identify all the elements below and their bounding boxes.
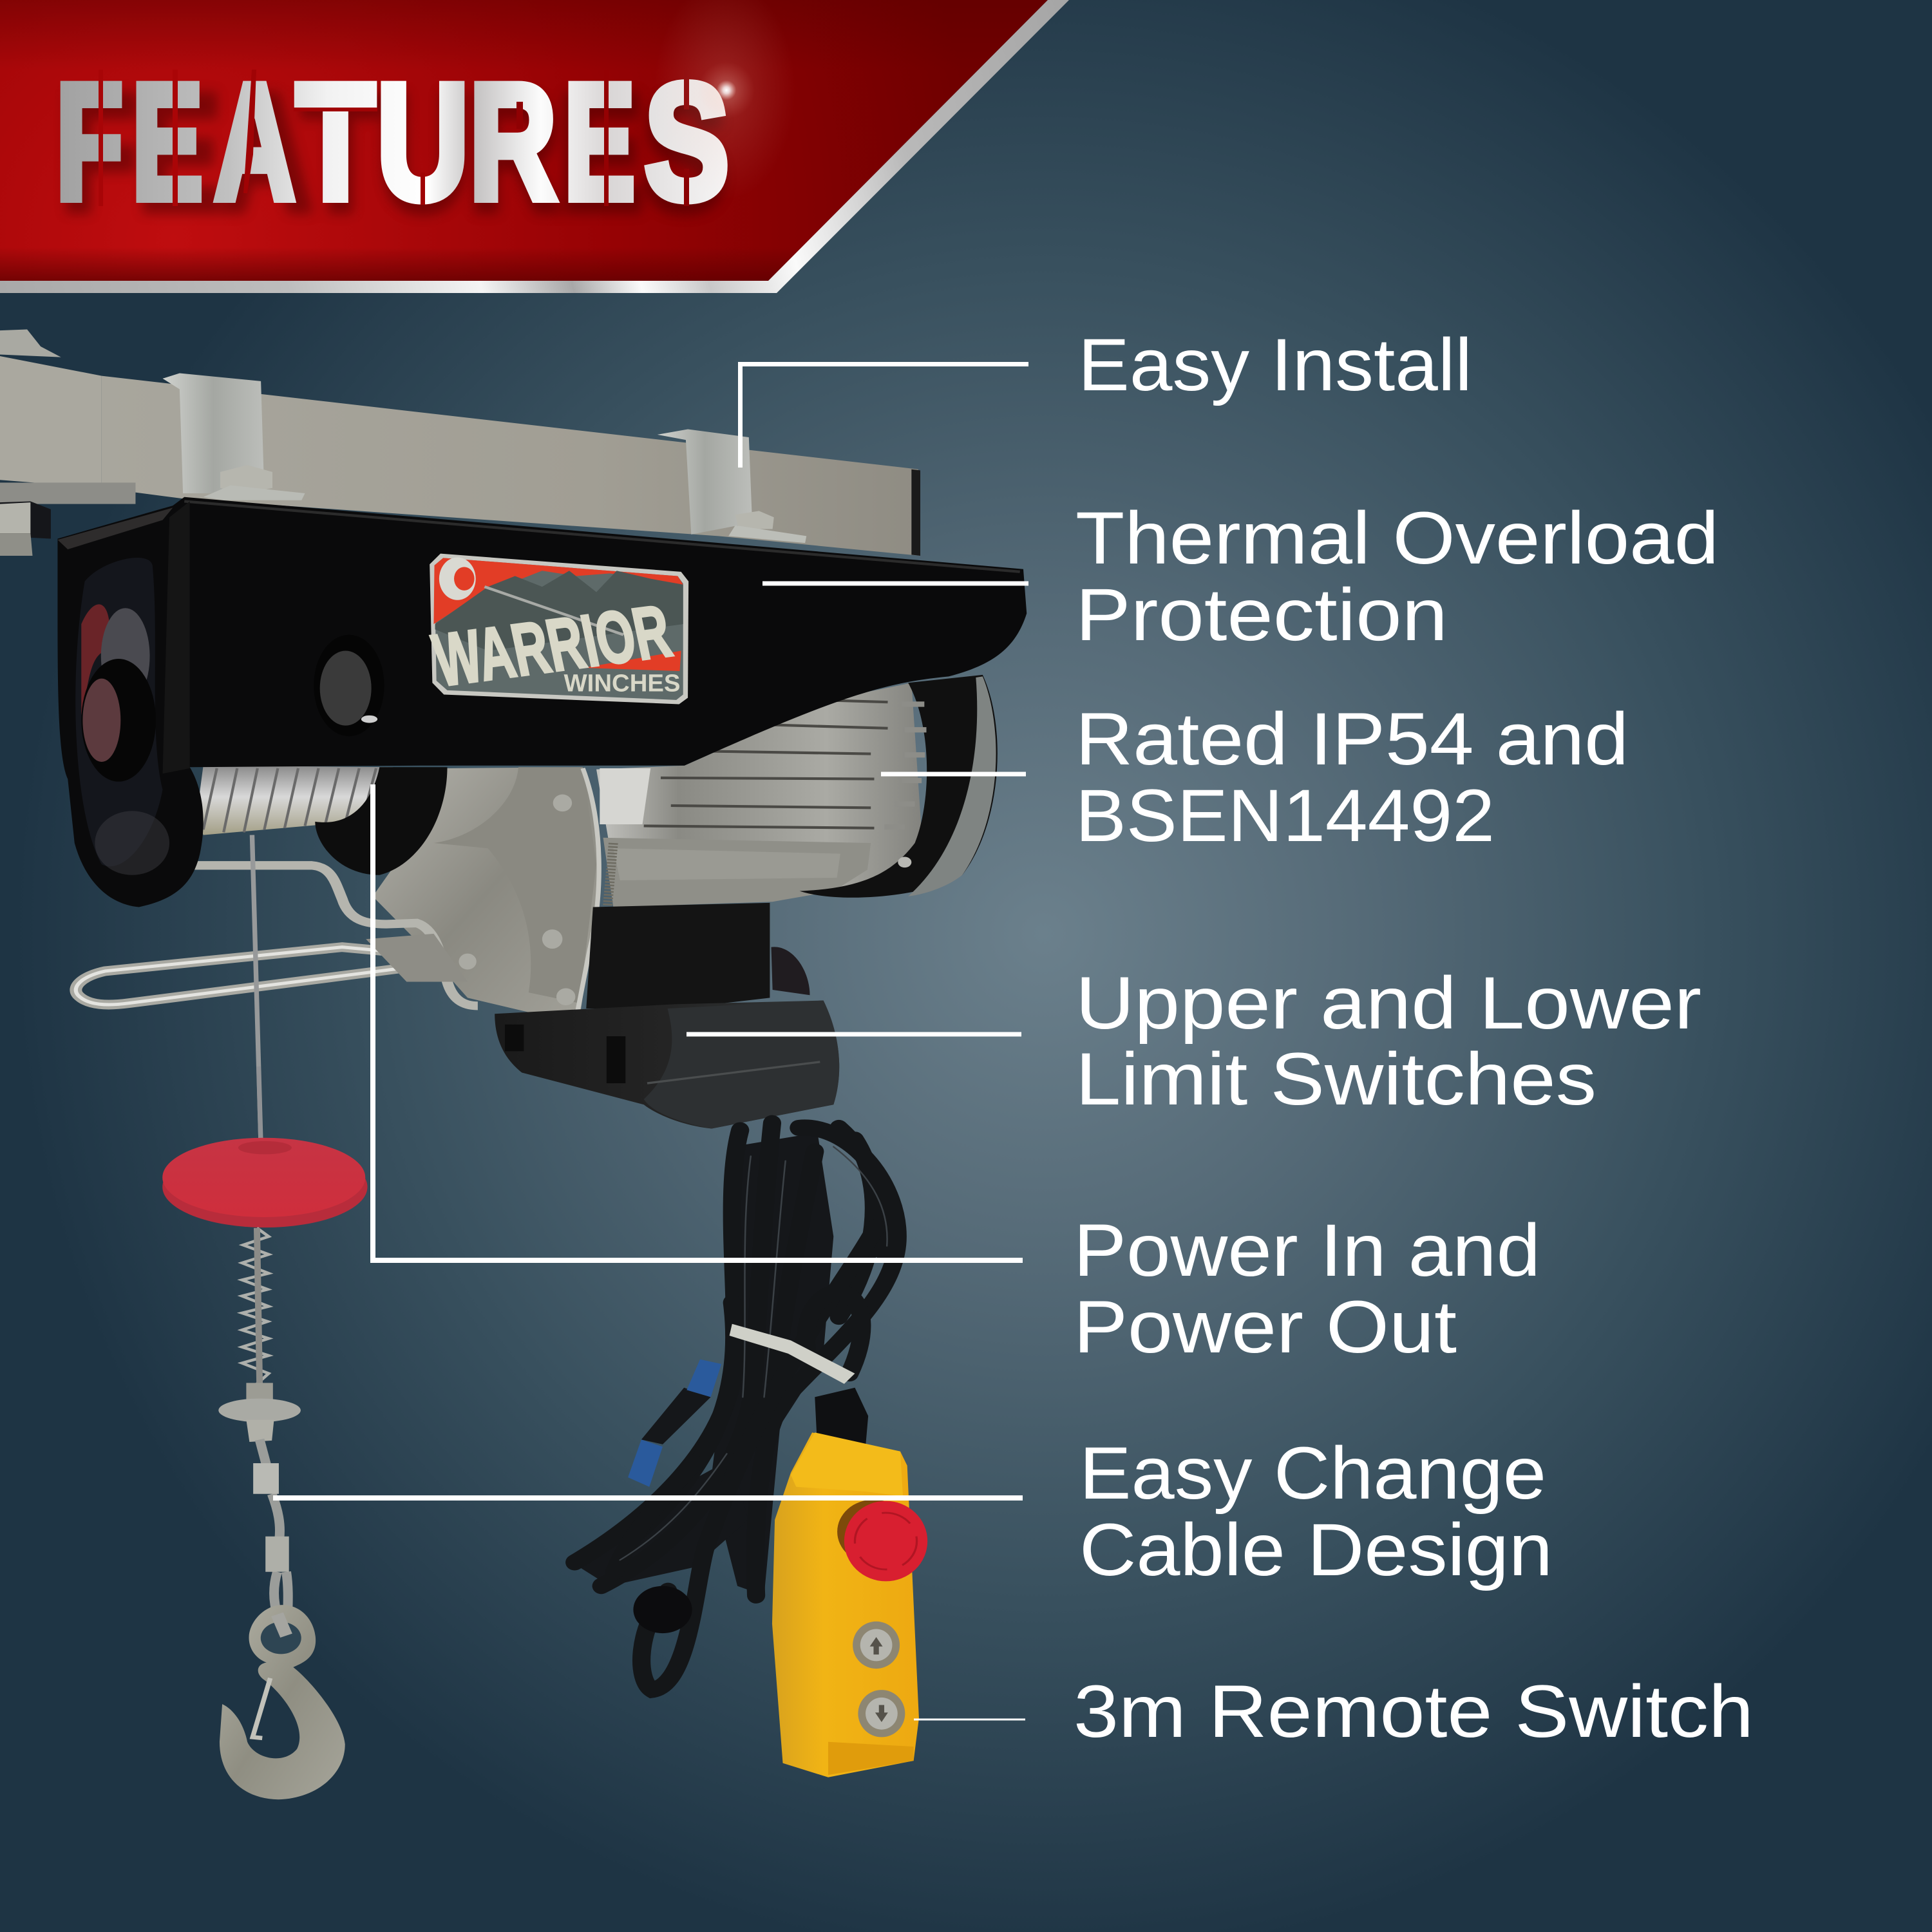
- label: limit switches: [1075, 962, 1701, 1121]
- gearbox bolts: [459, 795, 575, 1005]
- wheel hub: [81, 659, 156, 782]
- spring: [607, 843, 613, 918]
- cable highlights: [620, 1147, 887, 1560]
- heading: features: U: [377, 50, 469, 234]
- label: easy install: Easy Install: [1078, 324, 1472, 406]
- label: power in and out: Power In and: [1074, 1209, 1540, 1292]
- cable plug: [633, 1586, 692, 1633]
- beam end bolt: [0, 330, 135, 556]
- beam: [102, 376, 920, 556]
- limit switch housing: [495, 1001, 839, 1129]
- label: rated ip54: BSEN14492: [1075, 775, 1495, 857]
- cable coil: [574, 1123, 898, 1690]
- red stopper disc: [162, 1138, 368, 1227]
- spring: [242, 1228, 269, 1384]
- heading: features: F: [56, 50, 123, 234]
- black frame: [57, 497, 1027, 907]
- leader line: power in and out: [373, 784, 1023, 1260]
- label: rated ip54: [1075, 698, 1629, 857]
- heading: features: E: [564, 50, 635, 234]
- label: power in and out: Power Out: [1074, 1286, 1457, 1368]
- label: power in and out: [1074, 1209, 1540, 1368]
- connectors: [628, 1359, 721, 1487]
- heading: features: R: [469, 50, 556, 234]
- lower frame rod: [190, 866, 478, 1006]
- logo wordmark: WARRIOR: [426, 589, 677, 702]
- motor lower body: [603, 838, 871, 907]
- banner silver edge: [0, 0, 1069, 293]
- logo winches: WINCHES: [564, 670, 681, 697]
- lens flare: [654, 0, 795, 200]
- pendant body: [772, 1432, 919, 1777]
- control cable bundle: [572, 1123, 898, 1690]
- heading: features: T: [296, 50, 375, 234]
- stop button: [837, 1500, 927, 1581]
- leader line: easy install: [741, 365, 1028, 468]
- clamp left: [163, 373, 264, 493]
- wire to disc: [258, 1066, 261, 1147]
- warrior logo: [426, 554, 688, 704]
- cable mass: [572, 1133, 833, 1595]
- up button: [853, 1622, 900, 1669]
- label: thermal overload protection: Thermal Overload: [1075, 497, 1719, 580]
- motor end cap: [800, 675, 998, 898]
- label: thermal overload protection: [1075, 497, 1719, 656]
- remote pendant: [772, 1388, 927, 1777]
- clamp right: [658, 430, 752, 535]
- down button: [858, 1690, 905, 1737]
- leader line: limit switches: [687, 1032, 1021, 1037]
- leader line: thermal overload: [762, 581, 1028, 586]
- label: easy change cable design: Easy Change: [1079, 1432, 1546, 1515]
- cable tie: [730, 1324, 855, 1384]
- leader line: easy change cable: [273, 1495, 1023, 1501]
- cable and ferrules: [253, 1439, 289, 1633]
- label: easy change cable design: Cable Design: [1079, 1509, 1553, 1591]
- banner red panel: [0, 0, 1048, 281]
- wire drum: [196, 766, 393, 835]
- black motor mount: [586, 903, 770, 1009]
- label: easy change cable design: [1079, 1432, 1553, 1591]
- nuts and plates: [204, 465, 806, 543]
- title banner: [0, 0, 1069, 293]
- label: limit switches: Upper and Lower: [1075, 962, 1701, 1045]
- hook: [220, 1605, 345, 1799]
- gearbox: [373, 767, 599, 1019]
- heading: features: S: [645, 50, 729, 234]
- motor fins: [596, 683, 925, 891]
- leader line: rated ip54: [881, 772, 1026, 777]
- drum flange: [315, 767, 448, 875]
- label: limit switches: Limit Switches: [1075, 1038, 1596, 1121]
- washer and bolt: [218, 1383, 301, 1442]
- handle: [76, 947, 400, 1005]
- wire: [252, 835, 261, 1146]
- knob: [772, 947, 810, 995]
- label: thermal overload protection: Protection: [1075, 574, 1448, 656]
- heading: features: FEATURES: [61, 61, 726, 245]
- pendant strain relief: [815, 1388, 868, 1450]
- label: rated ip54: Rated IP54 and: [1075, 698, 1629, 781]
- frame plate reflections: [75, 558, 163, 866]
- hook assembly: [162, 1066, 368, 1799]
- access hole: [314, 635, 384, 736]
- leader line: remote switch: [914, 1718, 1025, 1721]
- heading: features: E: [132, 50, 203, 234]
- hoist upper assembly: [0, 330, 1027, 1146]
- heading: features: A: [214, 50, 295, 234]
- label: remote switch: 3m Remote Switch: [1074, 1671, 1754, 1753]
